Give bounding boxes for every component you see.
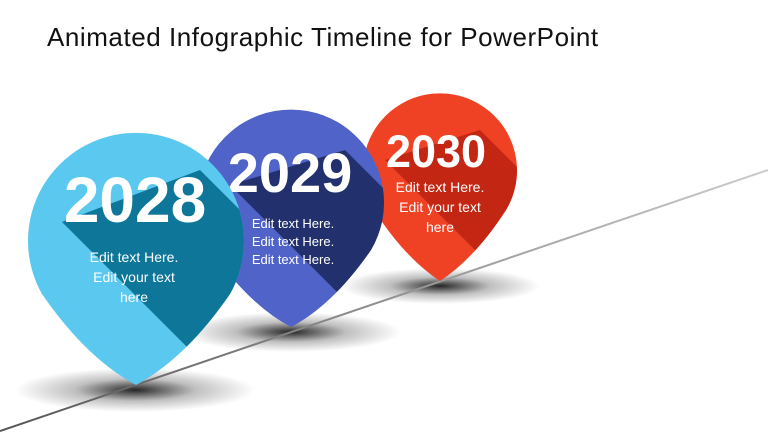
pin 2030: here bbox=[426, 219, 454, 235]
pin 2030 bbox=[366, 93, 517, 281]
pin 2028: Edit text Here. bbox=[90, 249, 178, 265]
pin 2028: 2028 bbox=[64, 164, 206, 236]
title: Animated Infographic Timeline for PowerPoint bbox=[47, 22, 599, 52]
pin 2029: 2029 bbox=[228, 141, 352, 204]
pin 2029: Edit text Here. bbox=[252, 234, 334, 249]
pin 2029 bbox=[208, 110, 384, 327]
pin 2030: Edit text Here. bbox=[396, 179, 484, 195]
timeline line bbox=[0, 170, 768, 431]
pin 2028: here bbox=[120, 289, 148, 305]
shadows bbox=[15, 268, 540, 412]
pin 2028: Edit your text bbox=[93, 269, 175, 285]
pin 2029: Edit text Here. bbox=[252, 252, 334, 267]
pin 2030: Edit your text bbox=[399, 199, 481, 215]
pin 2028 bbox=[28, 132, 244, 385]
pin 2030: 2030 bbox=[386, 126, 486, 177]
pin 2029: Edit text Here. bbox=[252, 216, 334, 231]
